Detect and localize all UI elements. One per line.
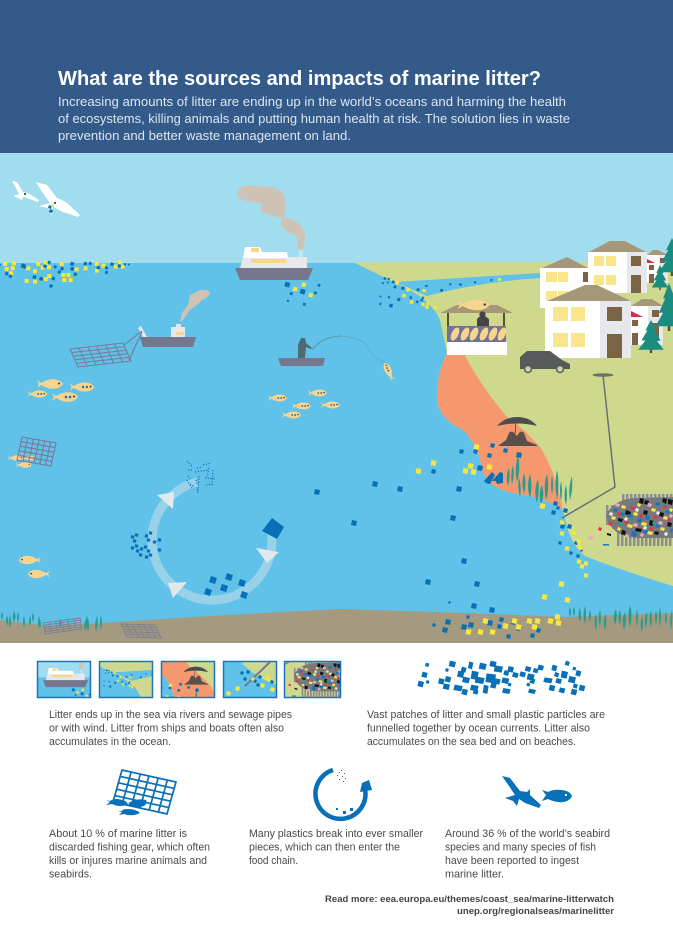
medium pieces [204,573,248,599]
text: fishing gear [49,828,210,880]
current arrows [157,492,279,598]
icon: net with fish [106,770,176,815]
horizon litter patch [0,260,130,288]
land [353,262,673,586]
text: plastics break down [249,828,423,867]
read more links [325,894,614,917]
pine trees [638,238,673,353]
backdrop: sky, sea, land [0,153,673,643]
text: plastics break down: Many plastics break into ever smaller [249,828,423,840]
text: ingestion [445,828,610,880]
microplastic dots [187,461,216,493]
text: fishing gear: kills or injures marine animals and [49,855,207,867]
text: vast patches: funnelled together by ocean currents. Litter also [367,722,590,734]
ghost net with trapped fish [8,437,56,468]
text: how litter enters the sea: Litter ends up in the sea via rivers and sewage pipes [49,709,293,721]
current ring with degrading litter [130,461,284,600]
rubbish dump [588,497,673,546]
header band [0,0,673,153]
fisherman in boat [278,336,385,366]
text: fishing gear: discarded fishing gear, which often [49,842,210,854]
icon: floating litter patch [417,661,585,695]
thumbnail: sewage pipe [223,661,277,698]
wet wipes and bottles on shore [484,472,503,484]
text: how litter enters the sea [49,709,293,748]
text: ingestion: marine litter. [445,868,504,880]
intro text: Increasing amounts of litter are ending up in the world’s oceans and harming the health [58,94,566,109]
text: ingestion: have been reported to ingest [445,855,579,867]
car [520,351,570,372]
small pieces [130,531,162,559]
thumbnail: river [0,595,280,889]
text: plastics break down: food chain. [249,855,298,867]
icon: plastic breakdown ring [315,770,372,819]
text: fishing gear: About 10 % of marine litter is [49,828,188,840]
back tall house [588,252,627,293]
intro text [58,94,570,143]
sea [0,263,673,643]
nets on the sea bed [43,618,161,638]
text: ingestion: Around 36 % of the world’s seabird [445,828,610,840]
main scene illustration [0,153,673,643]
seabirds [12,181,80,217]
text: fishing gear: seabirds. [49,868,92,880]
fishing trawler [70,290,210,367]
front house [545,300,600,358]
text: vast patches [367,709,605,748]
icon: seabird and fish [502,776,572,808]
text: ingestion: species and many species of fish [445,842,596,854]
sewage pipe [562,373,615,518]
read more links: Read more: eea.europa.eu/themes/coast_sea/marine-litterwatch [325,894,614,905]
houses [540,241,668,358]
intro text: of ecosystems, killing animals and putting human health at risk. The solution lies in waste [58,111,570,126]
stall on shore [440,300,513,355]
far right house [647,255,659,283]
text: how litter enters the sea: accumulates in the ocean. [49,736,171,748]
thumbnail: rubbish dump [0,420,350,765]
blue and yellow litter drifting along the coast [314,443,588,639]
fish shoals [19,361,396,578]
ship litter [284,282,321,306]
river mouth litter [379,277,501,310]
text: vast patches: accumulates on the sea bed and on beaches. [367,736,576,748]
couple under umbrella [497,417,537,446]
large plastic piece [262,518,284,539]
intro text: prevention and better waste management on land. [58,128,351,143]
thumbnail: beach [0,503,300,807]
thumbnail: ship [0,613,304,898]
sea bed [0,609,673,643]
cargo ship [235,186,313,280]
ship smoke [237,186,305,250]
read more links: unep.org/regionalseas/marinelitter [457,906,614,917]
beach [437,352,563,510]
trawl net [70,343,131,367]
right small house [631,306,648,345]
sky [0,153,673,263]
river [395,273,540,296]
text: how litter enters the sea: or with wind. Litter from ships and boats often also [49,722,284,734]
text: plastics break down: pieces, which can then enter the [249,842,400,854]
text: vast patches: Vast patches of litter and small plastic particles are [367,709,605,721]
seagrass [1,455,672,632]
title: What are the sources and impacts of marine litter? [58,68,541,90]
back left house [540,268,588,308]
